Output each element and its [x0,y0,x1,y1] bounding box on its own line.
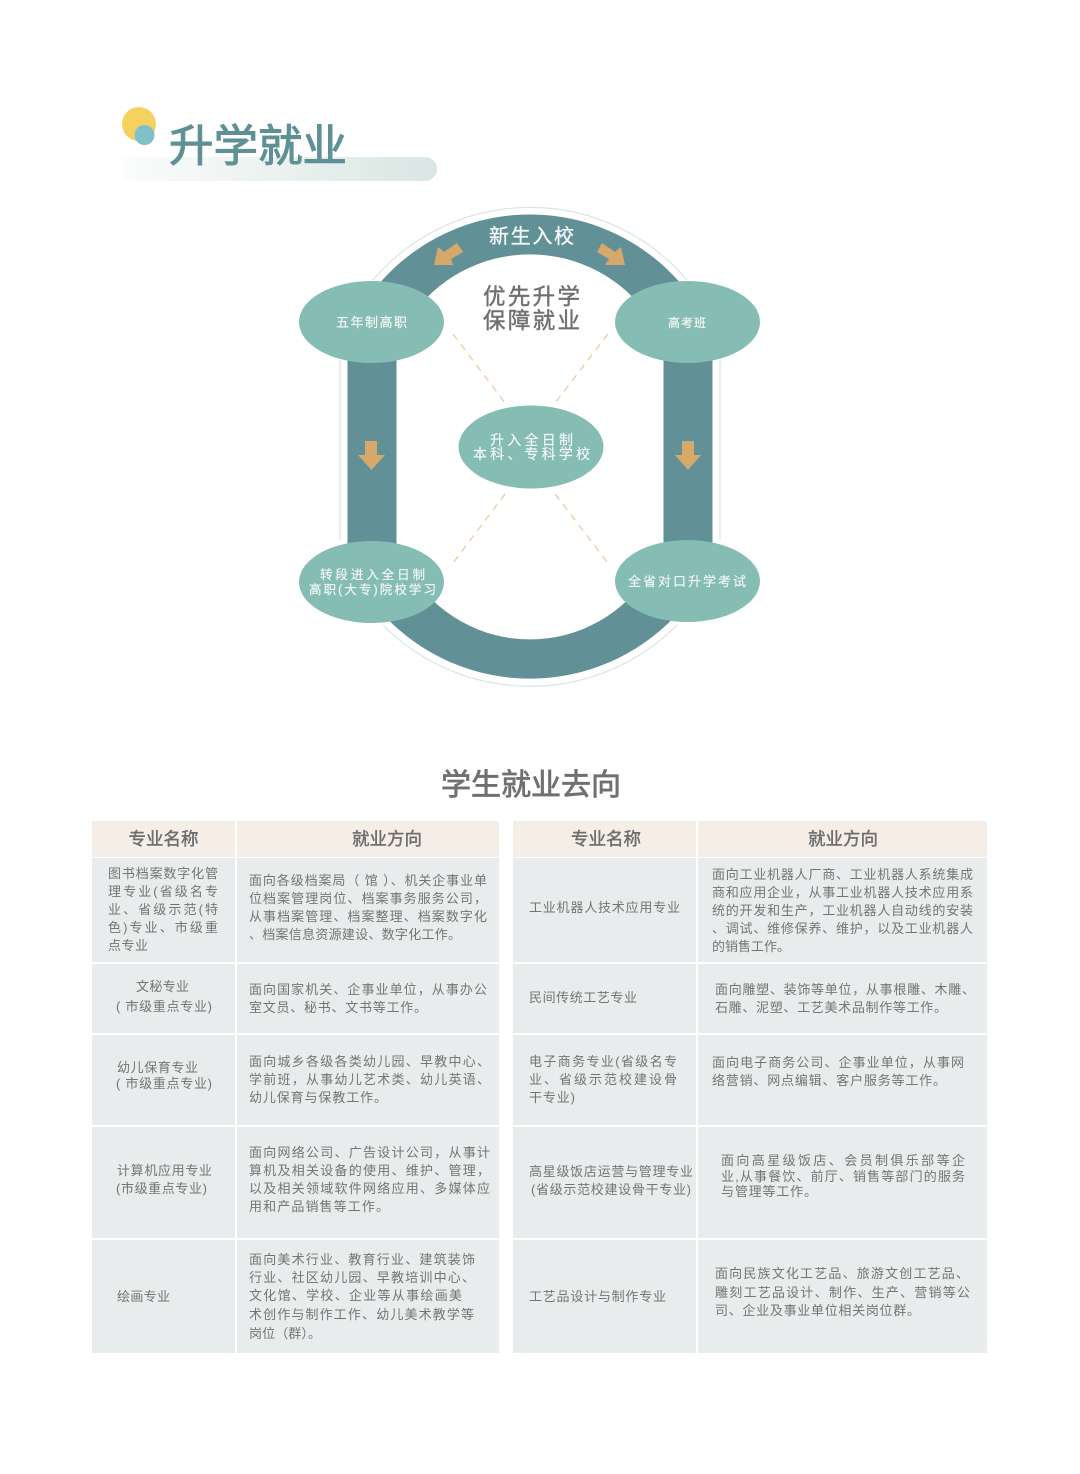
row 4 right: direction [721,1153,965,1199]
track label: 新生入校: 新生入校 [489,225,574,248]
node: 升入全日制: 本科、专科学校 [473,446,590,462]
row 5 left: direction: 行业、社区幼儿园、早教培训中心、 [249,1270,475,1285]
row 4 right: major [529,1164,693,1197]
center slogan [483,284,580,334]
arrow: top left [434,243,463,265]
row 1 right: direction: 、调试、维修保养、维护，以及工业机器人 [712,921,973,936]
row 1 left: major: 理专业(省级名专 [108,884,218,899]
row 3 right: direction: 络营销、网点编辑、客户服务等工作。 [712,1073,946,1088]
row 4 right: direction: 业,从事餐饮、前厅、销售等部门的服务 [721,1169,965,1184]
row 1 left: major: 图书档案数字化管 [108,866,218,881]
row 1 left: major: 业、省级示范(特 [108,902,218,917]
table header row: 专业名称 [128,829,198,849]
table header row: 就业方向 [352,829,422,849]
center slogan: 保障就业 [483,308,580,334]
table title: 学生就业去向 [441,769,621,802]
ring track [348,214,712,679]
row 4 right: direction: 面向高星级饭店、会员制俱乐部等企 [721,1153,965,1168]
row 4 left: major [116,1163,212,1196]
row 1 left: direction: 、档案信息资源建设、数字化工作。 [249,927,461,942]
node: 升入全日制: 升入全日制 [490,432,573,448]
row 3 right: major: 干专业) [529,1090,575,1105]
row 3 right: direction: 面向电子商务公司、企事业单位，从事网 [712,1055,964,1070]
section heading: 升学就业 [122,107,437,181]
row 4 left: direction: 面向网络公司、广告设计公司，从事计 [249,1145,490,1160]
arrow: left down [358,441,385,470]
row 4 left: direction: 以及相关领域软件网络应用、多媒体应 [249,1181,490,1196]
row 3 right: major [529,1054,677,1105]
row 2 left: direction [249,982,487,1015]
node: 高考班 [615,281,760,363]
dotted outer outline [340,207,720,686]
row 1 right: direction: 商和应用企业，从事工业机器人技术应用系 [712,885,973,900]
row 5 right: direction: 面向民族文化工艺品、旅游文创工艺品、 [715,1266,969,1281]
row 1 right: direction: 的销售工作。 [712,939,790,954]
row 2 right: direction: 面向雕塑、装饰等单位，从事根雕、木雕、 [715,982,975,997]
table header row [128,829,878,849]
row 2 left: major [116,979,212,1014]
arrow: right down [675,441,701,470]
node: 全省对口升学考试 [615,540,760,622]
row 5 left: major: 绘画专业 [117,1289,170,1304]
node: 全省对口升学考试: 全省对口升学考试 [628,574,746,589]
row 2 right: direction: 石雕、泥塑、工艺美术品制作等工作。 [715,1000,947,1015]
row 5 left: direction [249,1252,475,1341]
row 4 left: major: (市级重点专业) [116,1181,207,1196]
row 3 left: major: ( 市级重点专业) [116,1076,212,1091]
node: 五年制高职: 五年制高职 [336,315,407,330]
row 3 left: direction [249,1054,490,1105]
arrow: top right [597,243,625,265]
row 3 right: major: 电子商务专业(省级名专 [529,1054,677,1069]
row 5 right: direction [715,1266,970,1318]
row 3 left: major [116,1060,212,1091]
row 3 right: direction [712,1055,964,1088]
table backgrounds [92,821,987,1353]
row 4 left: direction: 用和产品销售等工作。 [249,1199,389,1214]
row 2 left: direction: 面向国家机关、企事业单位，从事办公 [249,982,487,997]
row 3 left: direction: 学前班，从事幼儿艺术类、幼儿英语、 [249,1072,490,1087]
row 1 right: direction: 统的开发和生产，工业机器人自动线的安装 [712,903,973,918]
row 5 left: direction: 文化馆、学校、企业等从事绘画美 [249,1288,462,1303]
row 1 left: direction [249,873,487,942]
node: 高考班: 高考班 [668,315,706,330]
center slogan: 优先升学 [483,284,580,310]
row 5 right: direction: 雕刻工艺品设计、制作、生产、营销等公 [715,1285,970,1300]
node: 五年制高职 [299,281,444,363]
row 1 left: major [108,866,218,953]
node: 转段进入全日制: 高职(大专)院校学习 [309,582,436,597]
row 4 left: direction: 算机及相关设备的使用、维护、管理， [249,1163,490,1178]
heading gradient bar [124,157,437,181]
row 1 right: direction: 面向工业机器人厂商、工业机器人系统集成 [712,867,973,882]
row 2 right: direction [715,982,975,1015]
icon: yellow and teal dots [122,107,156,145]
row 2 left: direction: 室文员、秘书、文书等工作。 [249,1000,427,1015]
row 2 left: major: ( 市级重点专业) [116,999,212,1014]
row 2 left: major: 文秘专业 [136,979,189,994]
row 3 right: major: 业、省级示范校建设骨 [529,1072,677,1087]
row 5 left: direction: 面向美术行业、教育行业、建筑装饰 [249,1252,475,1267]
table header row: 就业方向 [808,829,878,849]
node: 转段进入全日制 [299,541,444,623]
node: 升入全日制 [458,406,604,488]
row 1 right: direction [712,867,973,954]
row 1 left: direction: 从事档案管理、档案整理、档案数字化 [249,909,487,924]
row 1 left: major: 色)专业、市级重 [108,920,218,935]
row 1 right: major: 工业机器人技术应用专业 [529,900,680,915]
row 4 left: direction [249,1145,490,1214]
row 5 right: direction: 司、企业及事业单位相关岗位群。 [715,1303,920,1318]
table header row: 专业名称 [571,829,641,849]
row 3 left: direction: 幼儿保育与保教工作。 [249,1090,387,1105]
row 1 left: major: 点专业 [108,938,148,953]
row 1 left: direction: 位档案管理岗位、档案事务服务公司， [249,891,487,906]
row 4 right: direction: 与管理等工作。 [721,1184,817,1199]
row 5 left: direction: 岗位（群）。 [249,1326,321,1341]
row 1 left: direction: 面向各级档案局（ 馆 ）、机关企事业单 [249,873,487,888]
row 2 right: major: 民间传统工艺专业 [529,990,637,1005]
node: 转段进入全日制: 转段进入全日制 [320,567,425,582]
row 4 left: major: 计算机应用专业 [117,1163,212,1178]
heading text: 升学就业 [169,122,347,171]
row 5 right: major: 工艺品设计与制作专业 [529,1289,666,1304]
row 3 left: major: 幼儿保育专业 [117,1060,198,1075]
row 4 right: major: 高星级饭店运营与管理专业 [529,1164,693,1179]
row 3 left: direction: 面向城乡各级各类幼儿园、早教中心、 [249,1054,490,1069]
flow diagram [299,207,760,686]
dashed connectors [453,334,608,563]
row 5 left: direction: 术创作与制作工作、幼儿美术教学等 [249,1307,474,1322]
row 4 right: major: (省级示范校建设骨干专业) [531,1182,691,1197]
